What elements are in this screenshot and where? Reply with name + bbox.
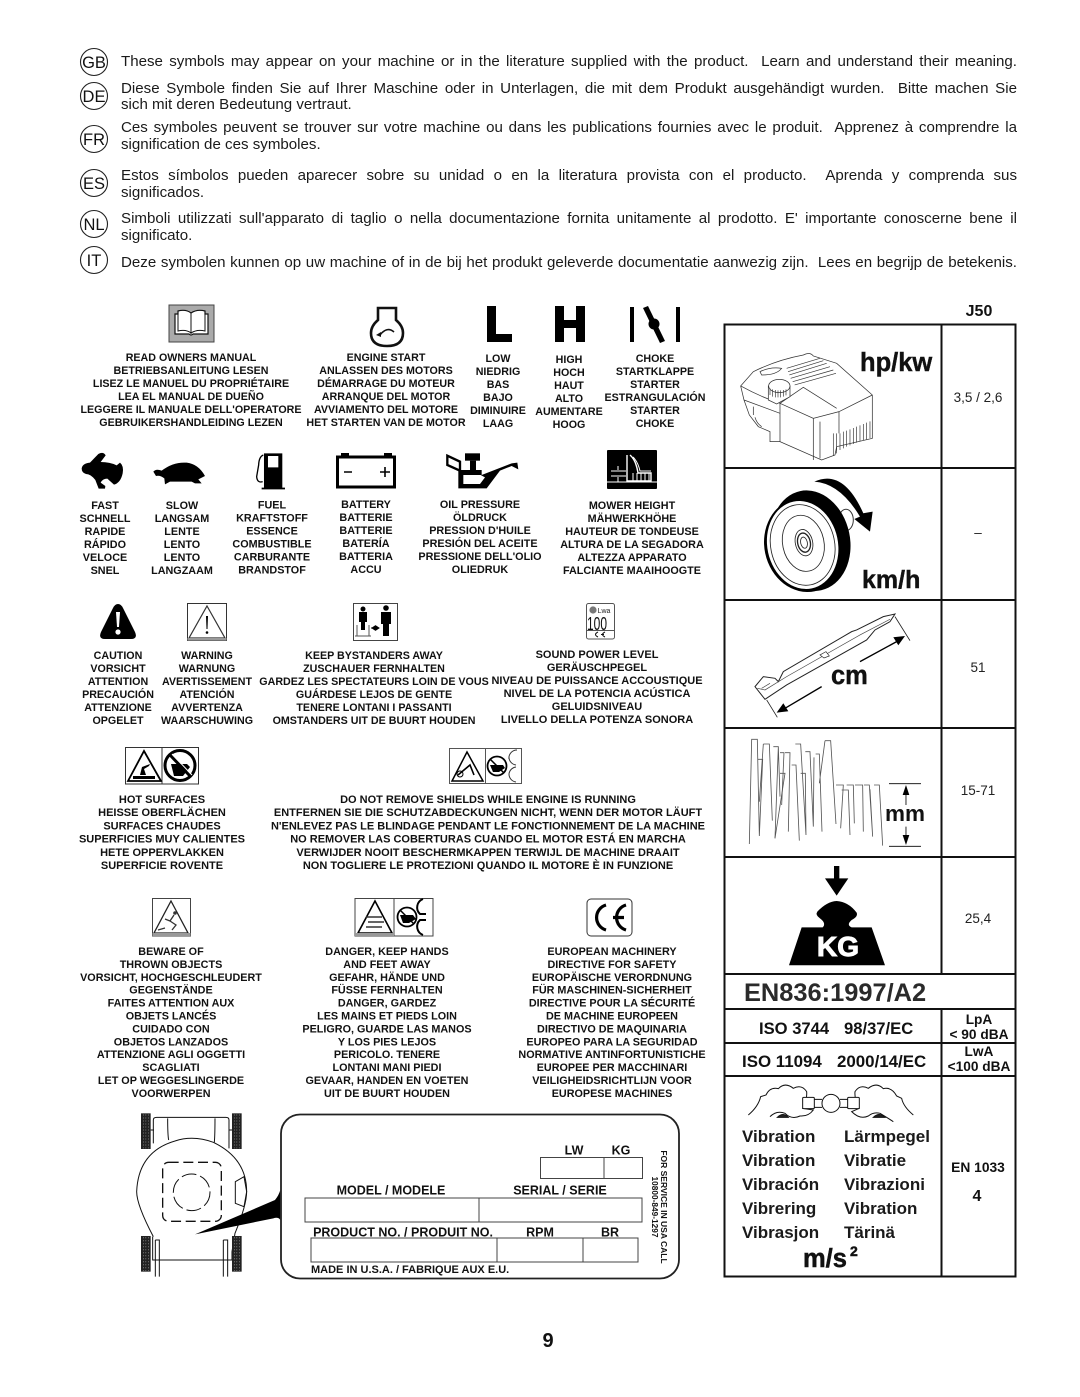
- intro ES line 2: significados.: [121, 184, 204, 201]
- icon: thrown objects sign: [152, 898, 190, 936]
- label: THROWN OBJECTS: [120, 959, 222, 971]
- label: EUROPESE MACHINES: [552, 1088, 672, 1100]
- label: GELUIDSNIVEAU: [552, 701, 642, 713]
- noise row ISO 3744: < 90 dBA: [950, 1027, 1009, 1042]
- spec row: weight: [789, 866, 992, 965]
- icon: shield signs: [450, 748, 522, 784]
- label: ARRANQUE DEL MOTOR: [322, 391, 451, 403]
- intro text: languages: [121, 53, 1017, 271]
- icon: fuel pump: [257, 453, 285, 489]
- label: HIGH: [556, 354, 582, 366]
- J50 model heading: J50: [966, 303, 992, 320]
- label: PRECAUCIÓN: [82, 688, 154, 701]
- heading: cm: [831, 662, 868, 690]
- label: ACCU: [350, 564, 382, 576]
- label: STARTER: [630, 379, 680, 391]
- label: GEBRUIKERSHANDLEIDING LEZEN: [99, 417, 283, 429]
- noise row ISO 3744: ISO 3744: [759, 1019, 830, 1038]
- symbol: do not remove shields: [271, 748, 705, 872]
- label: LANGSAM: [155, 513, 209, 525]
- intro IT line 2: significato.: [121, 227, 192, 244]
- label: DANGER, GARDEZ: [338, 998, 437, 1010]
- label: HOOG: [553, 419, 585, 431]
- noise row ISO 3744: 98/37/EC: [844, 1019, 913, 1038]
- label: LIVELLO DELLA POTENZA SONORA: [501, 714, 693, 726]
- label: CARBURANTE: [234, 552, 310, 564]
- badge IT: IT: [87, 252, 101, 270]
- symbol: slow: [151, 463, 213, 577]
- unit m/s2: 2: [850, 1243, 858, 1259]
- icon: mower height: [607, 450, 657, 489]
- vibration translations: Vibration: [742, 1127, 815, 1146]
- intro DE line 1: Diese Symbole finden Sie auf Ihrer Maschine oder in Unterlagen, die mit dem Produkt ausgehändigt wurden. Bitte machen Sie: [121, 80, 1017, 97]
- label: PERICOLO. TENERE: [334, 1049, 440, 1061]
- label: BEWARE OF: [138, 946, 204, 958]
- label: SOUND POWER LEVEL: [536, 649, 659, 661]
- icon: engine: [371, 308, 403, 346]
- icon: battery: [338, 453, 394, 487]
- label: HAUT: [554, 380, 584, 392]
- badge DE: [80, 82, 108, 110]
- label: OLIEDRUK: [452, 564, 508, 576]
- label heads: KG: [612, 1144, 630, 1158]
- label: VORSICHT: [90, 663, 146, 675]
- label: SNEL: [91, 565, 120, 577]
- label: KEEP BYSTANDERS AWAY: [305, 650, 443, 662]
- label: BRANDSTOF: [238, 564, 306, 576]
- label: OPGELET: [92, 715, 144, 727]
- label: ENGINE START: [347, 352, 426, 364]
- symbol: hot surfaces: [79, 748, 245, 872]
- icon: weight: [789, 866, 885, 965]
- label: TENERE LONTANI I PASSANTI: [296, 702, 452, 714]
- label: FÜR MASCHINEN-SICHERHEIT: [532, 984, 692, 997]
- label: NON TOGLIERE LE PROTEZIONI QUANDO IL MOTORE È IN FUNZIONE: [303, 859, 673, 872]
- label: KRAFTSTOFF: [236, 512, 308, 524]
- symbol: warning: [161, 604, 253, 727]
- label: EUROPEAN MACHINERY: [547, 946, 677, 958]
- symbol: sound power level: [491, 604, 703, 726]
- label: GARDEZ LES SPECTATEURS LOIN DE VOUS: [259, 676, 489, 688]
- label: FAITES ATTENTION AUX: [108, 998, 235, 1010]
- label: ANLASSEN DES MOTORS: [319, 365, 453, 377]
- label: LEA EL MANUAL DE DUEÑO: [118, 390, 264, 403]
- label: BAJO: [483, 392, 513, 404]
- noise row ISO 11094: 2000/14/EC: [837, 1052, 926, 1071]
- label: AVERTISSEMENT: [162, 676, 253, 688]
- label: BETRIEBSANLEITUNG LESEN: [114, 365, 268, 377]
- noise row ISO 11094: ISO 11094: [742, 1052, 822, 1071]
- spec row: cutting height: [749, 739, 995, 846]
- badge FR: [80, 126, 108, 152]
- label heads: PRODUCT NO. / PRODUIT NO.: [313, 1226, 493, 1240]
- label: CUIDADO CON: [132, 1023, 210, 1035]
- label: PRESIÓN DEL ACEITE: [422, 537, 538, 550]
- label: NIEDRIG: [476, 366, 520, 378]
- label: ATTENZIONE: [84, 702, 152, 714]
- icon: warning sign: [188, 604, 226, 641]
- noise row ISO 11094: [742, 1044, 1010, 1074]
- heading: km/h: [862, 566, 920, 594]
- label: MÄHWERKHÖHE: [588, 512, 676, 525]
- vibration translations: Vibrering: [742, 1199, 816, 1218]
- intro GB line: These symbols may appear on your machine or in the literature supplied with the product. Learn and understand their meaning.: [121, 53, 1017, 70]
- label: FALCIANTE MAAIHOOGTE: [563, 565, 701, 577]
- label heads: SERIAL / SERIE: [513, 1184, 607, 1198]
- symbol: european machinery directive: [518, 899, 706, 1100]
- label: ATENCIÓN: [179, 688, 235, 701]
- vibration translations: [742, 1127, 930, 1242]
- label: PELIGRO, GUARDE LAS MANOS: [302, 1023, 472, 1035]
- label: VOORWERPEN: [132, 1088, 211, 1100]
- intro DE line 2: sich mit deren Bedeutung vertraut.: [121, 96, 352, 113]
- label: OBJETOS LANZADOS: [114, 1036, 228, 1048]
- icon: CE mark: [587, 899, 632, 936]
- label: ALTO: [555, 393, 583, 405]
- label: NO REMOVER LAS COBERTURAS CUANDO EL MOTOR ESTÁ EN MARCHA: [290, 833, 686, 846]
- intro FR line 1: Ces symboles peuvent se trouver sur votre machine ou dans les publications fournies avec le produit. Apprenez à comprendre la: [121, 119, 1017, 136]
- label: GEFAHR, HÄNDE UND: [329, 971, 445, 984]
- label: HOCH: [553, 367, 585, 379]
- label: DIRECTIVE FOR SAFETY: [548, 959, 677, 971]
- label: FAST: [91, 500, 119, 512]
- spec row: blade length: [755, 614, 986, 717]
- label: RAPIDE: [85, 526, 125, 538]
- label: AVVIAMENTO DEL MOTORE: [314, 404, 458, 416]
- label heads: MODEL / MODELE: [337, 1184, 445, 1198]
- label: PRESSIONE DELL'OLIO: [418, 551, 542, 563]
- symbol: high: [535, 306, 603, 431]
- label: HOT SURFACES: [119, 794, 205, 806]
- label: VELOCE: [83, 552, 127, 564]
- noise values LpA: LpA: [966, 1012, 992, 1027]
- label: BATTERIE: [339, 525, 393, 537]
- noise row ISO 11094: <100 dBA: [948, 1059, 1010, 1074]
- label: VERWIJDER NOOIT BESCHERMKAPPEN TERWIJL DE MACHINE DRAAIT: [296, 847, 680, 859]
- label heads: MADE IN U.S.A. / FABRIQUE AUX E.U.: [311, 1264, 509, 1276]
- label: DIMINUIRE: [470, 405, 526, 417]
- label: GEGENSTÄNDE: [129, 984, 213, 997]
- label: GERÄUSCHPEGEL: [547, 661, 647, 674]
- icon: choke: [630, 306, 680, 343]
- label: SLOW: [166, 500, 199, 512]
- noise row ISO 3744: [759, 1012, 1009, 1042]
- label: ALTEZZA APPARATO: [577, 552, 687, 564]
- vibration translations: Tärinä: [844, 1223, 896, 1242]
- label: ATTENZIONE AGLI OGGETTI: [97, 1049, 245, 1061]
- standard heading: EN836:1997/A2: [744, 979, 926, 1007]
- value: –: [974, 525, 982, 540]
- label: NIVEL DE LA POTENCIA ACÚSTICA: [504, 687, 690, 700]
- symbol: caution: [82, 604, 154, 727]
- label: LISEZ LE MANUEL DU PROPRIÉTAIRE: [93, 377, 289, 390]
- noise values LwA: LwA: [965, 1044, 994, 1059]
- icon: turtle: [153, 463, 205, 484]
- badge FR: FR: [83, 131, 105, 149]
- label: LET OP WEGGESLINGERDE: [98, 1075, 244, 1087]
- icon: sound level: Lwa: [598, 608, 611, 615]
- label: LAAG: [483, 418, 513, 430]
- specs table grid: [724, 324, 1016, 1276]
- label: VORSICHT, HOCHGESCHLEUDERT: [80, 972, 262, 984]
- label: MOWER HEIGHT: [589, 500, 676, 512]
- icon: caution triangle: [100, 604, 136, 639]
- label heads: [311, 1144, 630, 1276]
- label: LEGGERE IL MANUALE DELL'OPERATORE: [80, 404, 302, 416]
- badge NL: NL: [83, 216, 105, 234]
- heading: hp/kw: [860, 349, 932, 377]
- label: AVVERTENZA: [171, 702, 243, 714]
- vibration translations: Vibración: [742, 1175, 819, 1194]
- label: AND FEET AWAY: [343, 959, 431, 971]
- value: 15-71: [961, 783, 995, 798]
- label heads: BR: [601, 1226, 619, 1240]
- label: GEVAAR, HANDEN EN VOETEN: [306, 1075, 469, 1087]
- service phone text: 10800-849-1297: [650, 1177, 660, 1238]
- symbol: keep bystanders away: [259, 604, 489, 727]
- label: LENTE: [164, 526, 200, 538]
- label: LOW: [486, 353, 511, 365]
- label: SURFACES CHAUDES: [103, 820, 221, 832]
- label: ESSENCE: [246, 526, 298, 538]
- vibration translations: Lärmpegel: [844, 1127, 930, 1146]
- label: GUÁRDESE LEJOS DE GENTE: [296, 688, 452, 701]
- label: DIRECTIVE POUR LA SÉCURITÉ: [529, 997, 695, 1010]
- label: SCAGLIATI: [142, 1062, 200, 1074]
- icon: bystanders: [354, 604, 398, 640]
- label: N'ENLEVEZ PAS LE BLINDAGE PENDANT LE FONCTIONNEMENT DE LA MACHINE: [271, 820, 705, 832]
- label: HEISSE OBERFLÄCHEN: [98, 806, 226, 819]
- symbol: mower height: [560, 450, 704, 577]
- service phone text: FOR SERVICE IN USA CALL: [659, 1150, 669, 1264]
- label: SUPERFICIE ROVENTE: [101, 860, 223, 872]
- icon: sound level: 100: [587, 614, 607, 634]
- vibration translations: Vibrasjon: [742, 1223, 819, 1242]
- label: LES MAINS ET PIEDS LOIN: [317, 1010, 457, 1022]
- label: Y LOS PIES LEJOS: [338, 1036, 436, 1048]
- label: EUROPÄISCHE VERORDNUNG: [532, 971, 692, 984]
- vibration translations: Vibration: [742, 1151, 815, 1170]
- label: READ OWNERS MANUAL: [126, 352, 257, 364]
- label: LENTO: [164, 552, 200, 564]
- spec row: speed: [755, 479, 982, 600]
- icon: L: [487, 306, 512, 342]
- icon: hot surface signs: [126, 748, 198, 784]
- icon: H: [555, 306, 585, 342]
- label: STARTKLAPPE: [616, 366, 694, 378]
- label: UIT DE BUURT HOUDEN: [324, 1088, 450, 1100]
- label: HET STARTEN VAN DE MOTOR: [306, 417, 466, 429]
- label: EUROPEE PER MACCHINARI: [537, 1062, 687, 1074]
- spec row: engine power: [741, 349, 1002, 460]
- label: VEILIGHEIDSRICHTLIJN VOOR: [532, 1075, 692, 1087]
- intro FR line 2: signification de ces symboles.: [121, 136, 321, 153]
- label: AUMENTARE: [535, 406, 603, 418]
- heading: mm: [885, 801, 925, 826]
- label: DIRECTIVO DE MAQUINARIA: [537, 1023, 687, 1035]
- badge IT: [80, 246, 108, 274]
- label: LENTO: [164, 539, 200, 551]
- icon: engine: [741, 354, 872, 460]
- unit m/s2: m/s: [803, 1245, 847, 1273]
- symbol: read owners manual: [80, 305, 302, 429]
- icon: hands on handle: [748, 1085, 913, 1122]
- icon: wheel and arrow: [755, 479, 873, 600]
- symbol: battery: [338, 453, 394, 576]
- intro NL line: Deze symbolen kunnen op uw machine of in de bij het produkt geleverde documentatie aanwezig zijn. Lees en begrijp de betekenis.: [121, 254, 1017, 271]
- label heads: LW: [565, 1144, 584, 1158]
- label: BATERÍA: [342, 537, 390, 550]
- label: SUPERFICIES MUY CALIENTES: [79, 834, 245, 846]
- label: STARTER: [630, 405, 680, 417]
- symbol: low: [470, 306, 526, 430]
- value: 51: [970, 660, 986, 675]
- label: LANGZAAM: [151, 565, 213, 577]
- symbol: danger keep hands and feet away: [302, 898, 472, 1100]
- language badges: [80, 48, 108, 274]
- label: ZUSCHAUER FERNHALTEN: [303, 663, 445, 675]
- page number: 9: [542, 1330, 554, 1352]
- symbol: oil pressure: [418, 453, 542, 576]
- label: DANGER, KEEP HANDS: [325, 946, 449, 958]
- label: FUEL: [258, 500, 286, 512]
- value: 4: [973, 1188, 982, 1205]
- label: WARNING: [181, 650, 233, 662]
- data label plate: [281, 1114, 679, 1278]
- label: DE MACHINE EUROPEEN: [546, 1010, 678, 1022]
- label: LONTANI MANI PIEDI: [333, 1062, 441, 1074]
- symbol: beware of thrown objects: [80, 898, 262, 1100]
- label: NORMATIVE ANTINFORTUNISTICHE: [518, 1049, 706, 1061]
- label: OMSTANDERS UIT DE BUURT HOUDEN: [273, 715, 475, 727]
- label: HETE OPPERVLAKKEN: [100, 847, 224, 859]
- vibration translations: Vibrazioni: [844, 1175, 925, 1194]
- icon: blade: [755, 614, 910, 717]
- label: ESTRANGULACIÓN: [605, 391, 705, 404]
- symbol: choke: [605, 306, 705, 430]
- icon: oil can: [447, 453, 518, 488]
- label: HAUTEUR DE TONDEUSE: [565, 526, 699, 538]
- badge GB: GB: [82, 54, 106, 72]
- badge ES: ES: [83, 175, 105, 193]
- intro IT line 1: Simboli utilizzati sull'apparato di taglio o nella documentazione fornita unitamente al prodotto. E' importante conoscerne bene il: [121, 210, 1017, 227]
- icon: grass height: [749, 739, 921, 846]
- label: OIL PRESSURE: [440, 499, 520, 511]
- badge NL: [80, 210, 108, 238]
- badge DE: DE: [83, 88, 105, 106]
- label: ÖLDRUCK: [453, 511, 507, 524]
- label: EUROPEO PARA LA SEGURIDAD: [526, 1036, 698, 1048]
- vibration row: [742, 1085, 1005, 1273]
- label: SCHNELL: [80, 513, 131, 525]
- service phone text: [650, 1150, 669, 1264]
- label: CHOKE: [636, 418, 674, 430]
- icon: book: [169, 305, 214, 342]
- badge ES: [80, 170, 108, 196]
- symbol: engine start: [306, 308, 466, 429]
- label: COMBUSTIBLE: [232, 538, 312, 550]
- badge GB: [80, 48, 108, 76]
- value: 25,4: [965, 911, 992, 926]
- EN 1033: EN 1033: [951, 1160, 1005, 1175]
- symbol: fast: [80, 453, 131, 577]
- intro ES line 1: Estos símbolos pueden aparecer sobre su unidad o en la literatura provista con el producto. Aprenda y comprenda sus: [121, 167, 1017, 184]
- label: RÁPIDO: [84, 538, 126, 551]
- icon: hands and feet signs: [355, 898, 433, 936]
- label: FÜSSE FERNHALTEN: [331, 984, 443, 997]
- KG text: KG: [817, 931, 859, 962]
- label: NIVEAU DE PUISSANCE ACCOUSTIQUE: [491, 675, 703, 687]
- label boxes: [305, 1157, 642, 1262]
- vibration translations: Vibratie: [844, 1151, 906, 1170]
- label: BATTERIA: [339, 551, 393, 563]
- value: 3,5 / 2,6: [954, 390, 1002, 405]
- label: DÉMARRAGE DU MOTEUR: [317, 377, 455, 390]
- label: ENTFERNEN SIE DIE SCHUTZABDECKUNGEN NICHT, WENN DER MOTOR LÄUFT: [274, 806, 702, 819]
- label: BAS: [487, 379, 509, 391]
- vibration translations: Vibration: [844, 1199, 917, 1218]
- label: WARNUNG: [179, 663, 235, 675]
- label: WAARSCHUWING: [161, 715, 253, 727]
- mower top view diagram: [137, 1113, 280, 1277]
- label: PRESSION D'HUILE: [429, 525, 531, 537]
- label: CAUTION: [94, 650, 142, 662]
- symbol: fuel: [232, 453, 312, 576]
- icon: sound level: [586, 604, 614, 639]
- label: ALTURA DE LA SEGADORA: [560, 539, 704, 551]
- label: BATTERY: [341, 499, 392, 511]
- icon: rabbit: [82, 453, 123, 489]
- label: ATTENTION: [88, 676, 148, 688]
- label: OBJETS LANCÉS: [126, 1010, 216, 1022]
- label: CHOKE: [636, 353, 674, 365]
- label: DO NOT REMOVE SHIELDS WHILE ENGINE IS RUNNING: [340, 794, 636, 806]
- label: BATTERIE: [339, 512, 393, 524]
- label heads: RPM: [526, 1226, 554, 1240]
